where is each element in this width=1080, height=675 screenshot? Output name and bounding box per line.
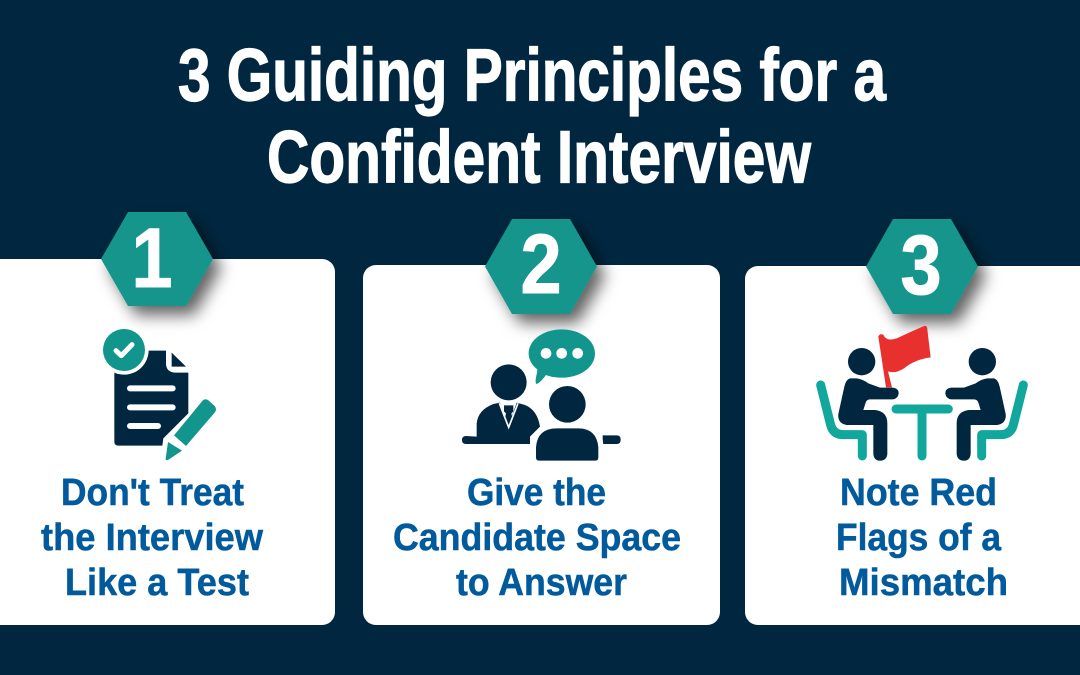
- icon: interview with speech bubble: [462, 329, 621, 465]
- label 3: Mismatch: [839, 562, 1008, 604]
- panel: principle 1: [0, 211, 335, 625]
- hexagon badge 3: 3: [900, 218, 942, 312]
- icon: two people at a table with red flag: [821, 326, 1023, 461]
- label 3: Flags of a: [836, 517, 1002, 559]
- label 1: Don't Treat: [61, 472, 244, 514]
- panel: principle 3: [745, 218, 1080, 625]
- title: Confident Interview: [267, 116, 811, 198]
- label 2: [393, 472, 681, 604]
- label 2: Candidate Space: [393, 517, 681, 559]
- hexagon badge 3: [866, 218, 978, 314]
- panel: principle 2: [363, 217, 720, 625]
- label 2: to Answer: [456, 562, 627, 604]
- title: 3 Guiding Principles for a: [178, 34, 887, 116]
- hexagon badge 1: 1: [131, 211, 173, 305]
- label 3: Note Red: [840, 472, 997, 514]
- label 3: [836, 472, 1008, 604]
- hexagon badge 1: [101, 211, 213, 306]
- hexagon badge 2: 2: [520, 217, 562, 311]
- hexagon badge 2: [485, 217, 597, 314]
- label 1: [41, 472, 263, 604]
- label 1: the Interview: [41, 517, 263, 559]
- title: [178, 34, 887, 198]
- icon: document with check and pencil: [99, 325, 220, 463]
- label 2: Give the: [467, 472, 606, 514]
- label 1: Like a Test: [65, 562, 249, 604]
